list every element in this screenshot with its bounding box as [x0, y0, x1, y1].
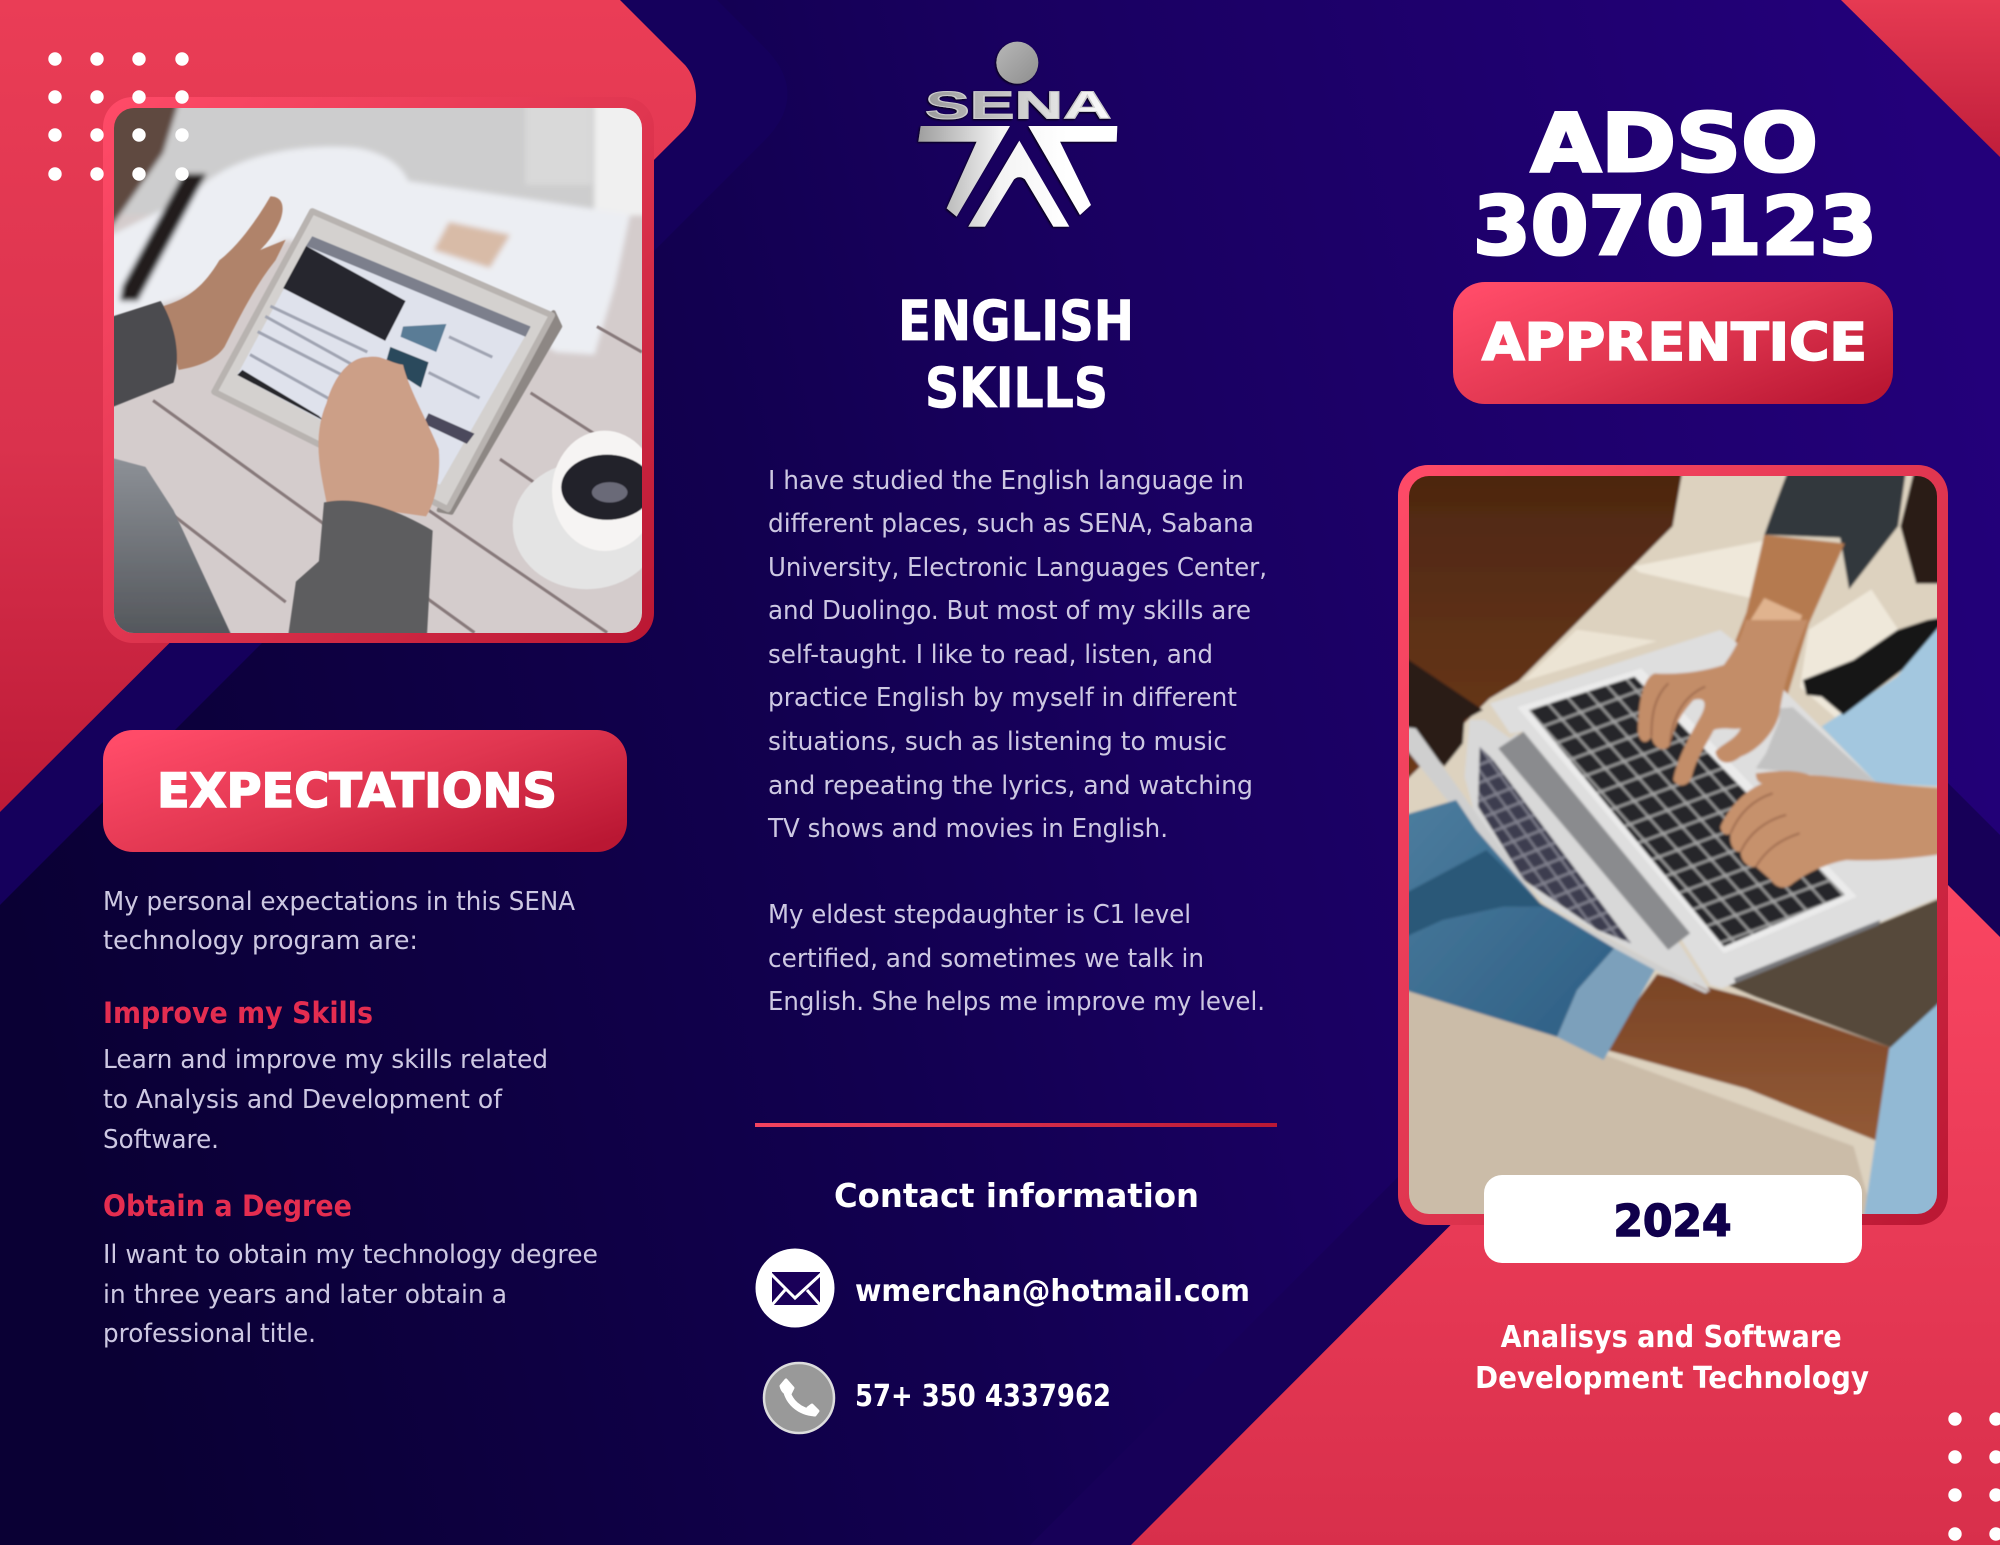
- icon: envelope: [756, 1248, 834, 1328]
- background shape: lower-right red diagonal: [1131, 806, 2000, 1545]
- button: expectations heading: EXPECTATIONS: [157, 764, 557, 819]
- label: year 2024: [1484, 1175, 1862, 1263]
- text block: english skills paragraph one: I have studied the English language in: [768, 466, 1244, 496]
- panel: tablet photo with frame: [92, 87, 663, 653]
- text block: english skills paragraph two: My eldest stepdaughter is C1 level: [768, 900, 1191, 930]
- photo: person typing on a laptop on a sofa: [1395, 462, 1952, 1228]
- text block: english skills paragraph one: [767, 466, 1267, 844]
- text block: program name: Analisys and Software: [1501, 1320, 1842, 1355]
- text block: improve my skills: Software.: [103, 1125, 219, 1155]
- panel: laptop photo with frame: [1395, 462, 1952, 1228]
- text block: english skills paragraph one: University, Electronic Languages Center,: [768, 553, 1267, 583]
- text block: obtain a degree: [103, 1240, 598, 1349]
- text block: english skills paragraph one: situations, such as listening to music: [768, 727, 1227, 757]
- text block: english skills paragraph one: practice English by myself in different: [768, 683, 1237, 713]
- dots pattern: bottom-right: [1948, 1412, 2000, 1541]
- heading: ADSO 3070123: [1473, 97, 1877, 273]
- text block: expectations intro: [103, 887, 575, 956]
- subheading: improve my skills: Improve my Skills: [103, 996, 373, 1030]
- icon: SENA logo: SENA: [925, 83, 1112, 127]
- text block: english skills paragraph one: TV shows and movies in English.: [767, 814, 1168, 844]
- label: year 2024: 2024: [1614, 1196, 1732, 1247]
- background shape: top-right red corner: [1841, 0, 2000, 157]
- text block: english skills paragraph one: different places, such as SENA, Sabana: [768, 509, 1254, 539]
- text block: english skills paragraph one: self-taught. I like to read, listen, and: [768, 640, 1213, 670]
- button: apprentice: APPRENTICE: [1482, 313, 1867, 373]
- text block: program name: [1475, 1320, 1869, 1396]
- background band: lower-right blue diagonal: [1030, 705, 2000, 1545]
- text block: obtain a degree: professional title.: [103, 1319, 316, 1349]
- text block: english skills paragraph one: and Duolingo. But most of my skills are: [768, 596, 1251, 626]
- text block: english skills paragraph two: English. She helps me improve my level.: [768, 987, 1265, 1017]
- icon: phone: [764, 1363, 834, 1433]
- text block: program name: Development Technology: [1475, 1361, 1869, 1396]
- text block: obtain a degree: Il want to obtain my technology degree: [103, 1240, 598, 1270]
- text block: english skills paragraph one: and repeating the lyrics, and watching: [768, 771, 1253, 801]
- text block: improve my skills: Learn and improve my skills related: [103, 1045, 548, 1075]
- email address: wmerchan@hotmail.com: [855, 1274, 1250, 1309]
- heading: english skills: [898, 289, 1134, 420]
- text block: obtain a degree: in three years and later obtain a: [103, 1280, 507, 1310]
- text block: improve my skills: [103, 1045, 548, 1155]
- text block: expectations intro: My personal expectations in this SENA: [103, 887, 575, 917]
- text block: english skills paragraph two: [768, 900, 1265, 1017]
- subheading: obtain a degree: Obtain a Degree: [103, 1189, 352, 1223]
- background shape: top-left red chevron: [0, 0, 696, 812]
- heading: contact information: Contact information: [834, 1176, 1199, 1215]
- text block: improve my skills: to Analysis and Development of: [103, 1085, 503, 1115]
- icon: SENA logo: [918, 42, 1117, 227]
- text block: english skills paragraph two: certified, and sometimes we talk in: [768, 944, 1204, 974]
- button: expectations heading: [103, 730, 627, 852]
- phone number: 57+ 350 4337962: [855, 1379, 1111, 1414]
- background band: top-left dark blue chevron: [0, 0, 788, 905]
- text block: expectations intro: technology program are:: [103, 926, 418, 956]
- button: apprentice: [1453, 282, 1893, 404]
- heading: english skills: ENGLISH: [898, 289, 1134, 353]
- heading: english skills: SKILLS: [925, 356, 1108, 420]
- dots pattern: top-left: [48, 52, 189, 181]
- heading: ADSO 3070123: 3070123: [1473, 180, 1877, 273]
- photo: hands using tablet on a wooden table: [114, 108, 642, 633]
- heading: ADSO 3070123: ADSO: [1531, 97, 1818, 190]
